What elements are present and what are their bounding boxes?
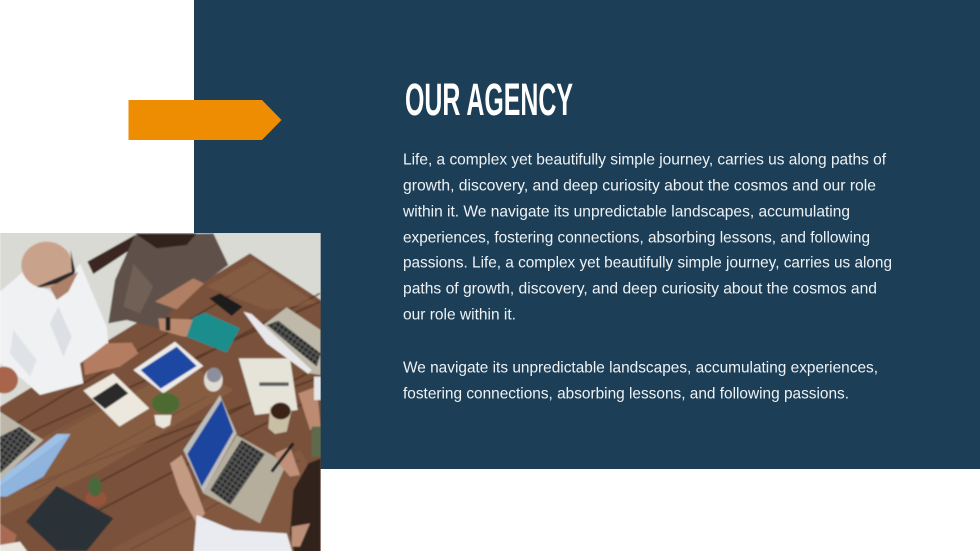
photo paper notepad — [239, 358, 298, 415]
text block: second paragraph: We navigate its unpredictable landscapes, accumulating experiences, — [403, 360, 878, 376]
photo coffee cup — [268, 407, 292, 434]
text block: second paragraph: fostering connections, absorbing lessons, and following passions. — [403, 386, 849, 402]
text block: first paragraph: paths of growth, discovery, and deep curiosity about the cosmos and — [403, 280, 877, 298]
photo left laptop — [0, 434, 71, 487]
photo center laptop — [203, 435, 287, 523]
text block: first paragraph — [402, 152, 892, 324]
photo bottom right person — [193, 515, 293, 551]
photo top right laptop — [263, 307, 321, 375]
photo man in white shirt — [0, 263, 108, 395]
photo right hand — [298, 387, 321, 430]
photo small plant pot — [85, 490, 107, 506]
photo floor and wall — [0, 233, 321, 407]
text block: second paragraph — [403, 360, 878, 402]
text block: first paragraph: passions. Life, a complex yet beautifully simple journey, carries us along — [403, 254, 892, 272]
photo dark notebook — [26, 486, 113, 551]
photo: team meeting around a table — [0, 230, 325, 551]
text block: first paragraph: experiences, fostering connections, absorbing lessons, and following — [403, 230, 870, 246]
text block: first paragraph: our role within it. — [403, 306, 516, 324]
photo chair — [87, 235, 135, 274]
photo hands and pen — [170, 455, 205, 523]
photo cup of pens — [204, 368, 223, 392]
photo phone — [209, 293, 243, 316]
photo teal notebook — [187, 313, 240, 353]
photo man head — [21, 242, 72, 288]
title: OUR AGENCY — [405, 74, 573, 125]
photo plant — [154, 415, 172, 428]
text block: first paragraph: Life, a complex yet beautifully simple journey, carries us along paths of — [403, 152, 887, 168]
text block: first paragraph: growth, discovery, and deep curiosity about the cosmos and our role — [403, 178, 876, 194]
photo woman in brown — [108, 233, 228, 328]
photo tablet — [133, 342, 203, 393]
photo man arm — [83, 343, 138, 375]
photo bottom left hand — [0, 524, 17, 545]
panel: navy background — [194, 0, 980, 469]
text block: first paragraph: within it. We navigate its unpredictable landscapes, accumulating — [402, 204, 850, 220]
photo table — [0, 253, 323, 551]
arrow: orange pentagon — [128, 100, 282, 140]
photo black notebook on white — [83, 373, 149, 427]
